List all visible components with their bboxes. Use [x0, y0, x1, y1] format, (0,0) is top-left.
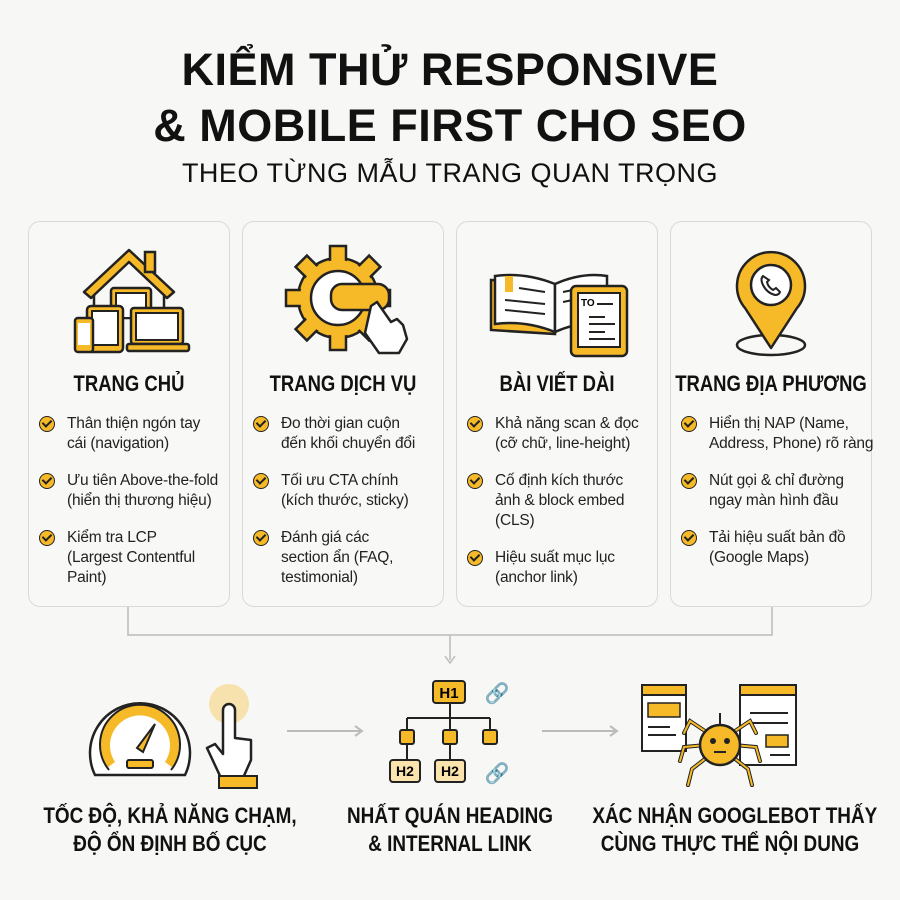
- bullet list: Tối ưu CTA chính: [281, 472, 398, 489]
- connector bracket arrow: [127, 607, 773, 664]
- bullet list: Hiệu suất mục lục: [495, 549, 615, 566]
- icon: house with devices: [74, 248, 190, 354]
- bullet list: ảnh & block embed: [495, 492, 624, 509]
- bullet list: (anchor link): [495, 569, 578, 586]
- heading: TRANG CHỦ: [74, 371, 184, 396]
- bullet list: [681, 415, 873, 566]
- heading: TRANG ĐỊA PHƯƠNG: [675, 371, 867, 396]
- label: speed: [43, 802, 297, 856]
- icon: gear with click: [284, 244, 408, 354]
- label: googlebot: CÙNG THỰC THỂ NỘI DUNG: [601, 831, 859, 856]
- bullet list: (hiển thị thương hiệu): [67, 492, 212, 509]
- icon: heading hierarchy: H2: [396, 763, 414, 779]
- bullet list: (Largest Contentful: [67, 549, 195, 566]
- arrow: [287, 725, 364, 737]
- heading: TRANG DỊCH VỤ: [270, 371, 416, 396]
- bullet list: Thân thiện ngón tay: [67, 415, 200, 432]
- bullet list: ngay màn hình đầu: [709, 492, 838, 509]
- panel: trang dich vu: [242, 221, 444, 607]
- icon: heading hierarchy: 🔗: [485, 761, 510, 785]
- bullet list: section ẩn (FAQ,: [281, 549, 393, 566]
- title: KIỂM THỬ RESPONSIVE: [182, 44, 718, 95]
- subtitle: THEO TỪNG MẪU TRANG QUAN TRỌNG: [182, 158, 718, 188]
- icon: book and tablet: [490, 274, 628, 358]
- bullet list: [39, 415, 218, 586]
- bullet list: Cố định kích thước: [495, 472, 623, 489]
- panel: bai viet dai: [456, 221, 658, 607]
- label: heading: [347, 803, 553, 856]
- label: speed: TỐC ĐỘ, KHẢ NĂNG CHẠM,: [43, 803, 297, 828]
- icon: heading hierarchy: 🔗: [485, 681, 510, 705]
- icon: spider crawling pages: [641, 684, 797, 787]
- bullet list: (CLS): [495, 512, 534, 529]
- label: googlebot: XÁC NHẬN GOOGLEBOT THẤY: [592, 803, 877, 828]
- bullet list: [253, 415, 415, 586]
- bullet list: Hiển thị NAP (Name,: [709, 415, 849, 432]
- label: speed: ĐỘ ỔN ĐỊNH BỐ CỤC: [73, 831, 267, 856]
- bullet list: Nút gọi & chỉ đường: [709, 472, 844, 489]
- icon: map pin with phone: [736, 250, 806, 356]
- label: googlebot: [592, 803, 877, 856]
- bullet list: Khả năng scan & đọc: [495, 415, 639, 432]
- title: & MOBILE FIRST CHO SEO: [153, 100, 747, 151]
- label: heading: NHẤT QUÁN HEADING: [347, 803, 553, 828]
- bullet list: Tải hiệu suất bản đồ: [709, 529, 845, 546]
- icon: heading hierarchy: H2: [441, 763, 459, 779]
- bullet list: (kích thước, sticky): [281, 492, 409, 509]
- bullet list: (Google Maps): [709, 549, 809, 566]
- bullet list: cái (navigation): [67, 435, 169, 452]
- bullet list: Address, Phone) rõ ràng: [709, 435, 873, 452]
- bullet list: Paint): [67, 569, 106, 586]
- heading: BÀI VIẾT DÀI: [499, 371, 615, 396]
- bullet list: Kiểm tra LCP: [67, 529, 157, 546]
- title: [153, 44, 747, 151]
- bullet list: Đánh giá các: [281, 529, 369, 546]
- bullet list: đến khối chuyển đổi: [281, 435, 415, 452]
- icon: speedometer and touch: [88, 684, 258, 789]
- label: heading: & INTERNAL LINK: [368, 831, 532, 856]
- bullet list: [467, 415, 639, 586]
- arrow: [542, 725, 618, 737]
- bullet list: testimonial): [281, 569, 358, 586]
- panel: trang dia phuong: [670, 221, 872, 607]
- bullet list: (cỡ chữ, line-height): [495, 435, 630, 452]
- icon: heading hierarchy: H1: [439, 685, 459, 702]
- icon: heading hierarchy: [389, 680, 510, 785]
- panel: trang chu: [28, 221, 230, 607]
- bullet list: Ưu tiên Above-the-fold: [67, 472, 218, 489]
- bullet list: Đo thời gian cuộn: [281, 415, 400, 432]
- icon: book and tablet: TO: [581, 298, 595, 309]
